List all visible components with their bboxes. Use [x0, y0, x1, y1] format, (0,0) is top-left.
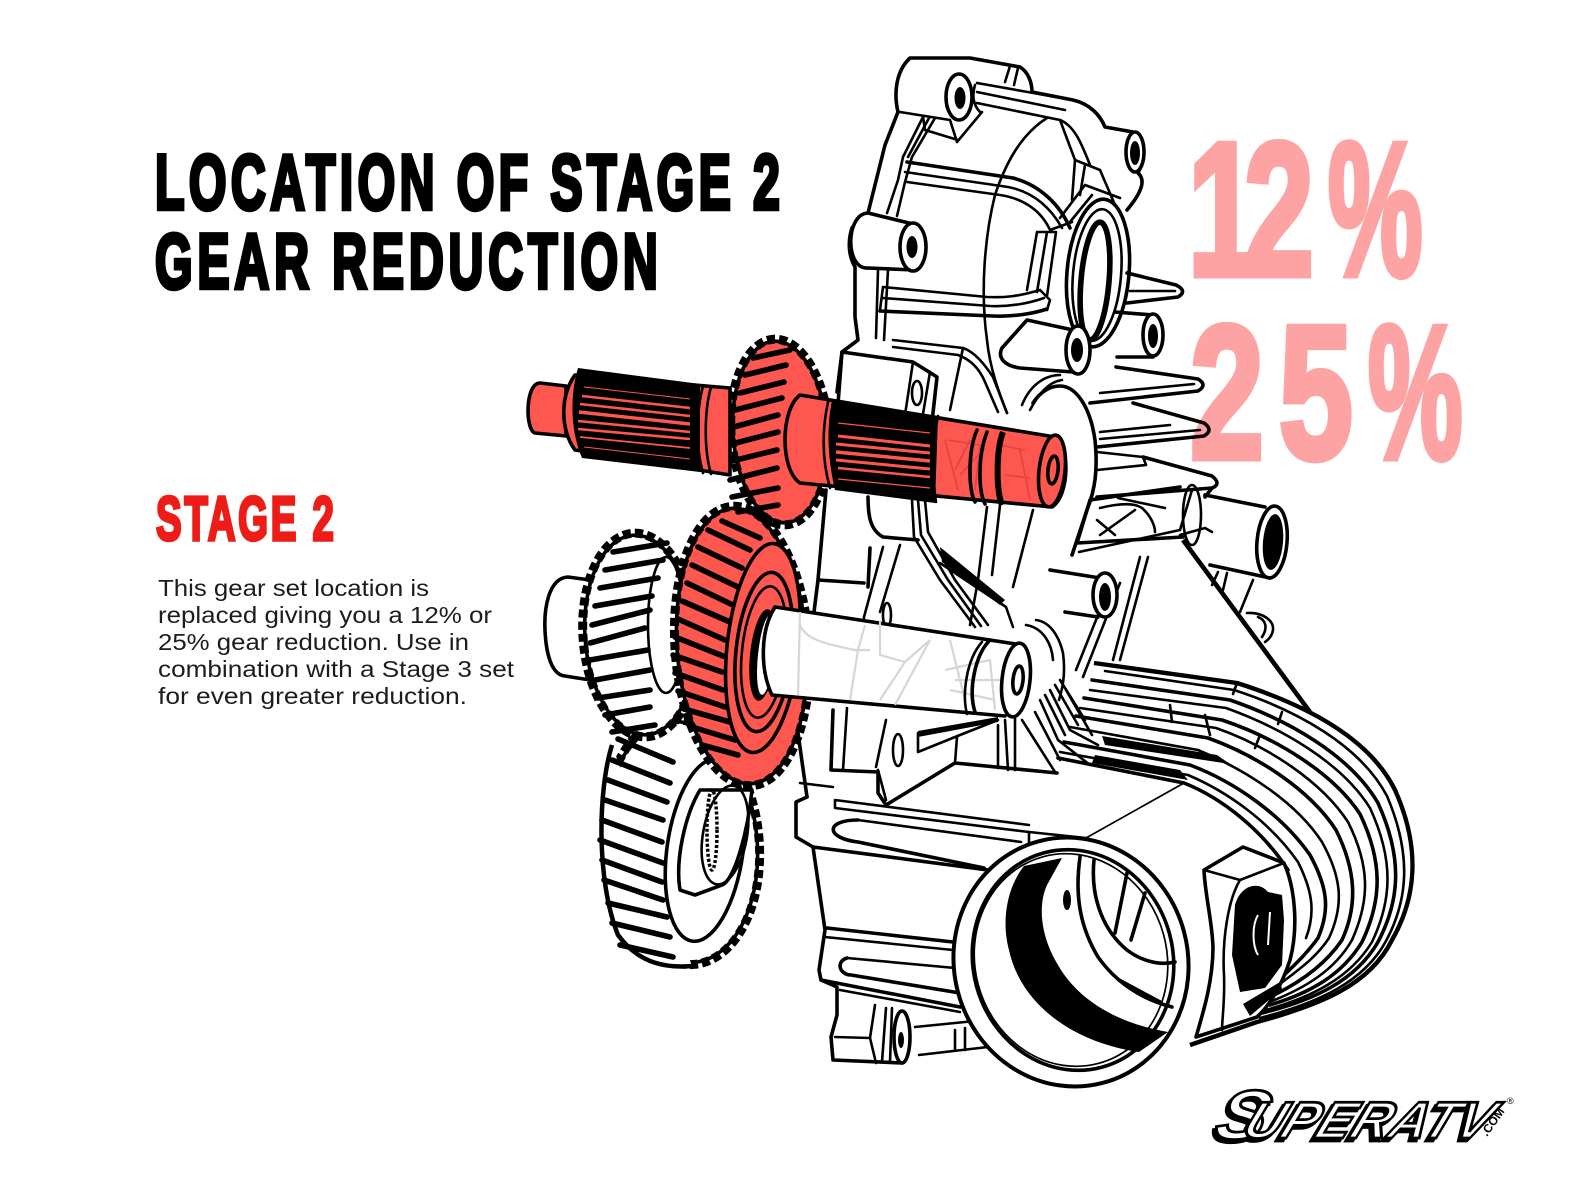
- upper lug bolt hole: [946, 74, 972, 120]
- helical teeth: [590, 543, 667, 732]
- cooling fins: [1090, 273, 1217, 497]
- gear inner ring: [655, 754, 755, 946]
- value: 12%: [1188, 103, 1423, 316]
- shaft collars: [970, 430, 987, 504]
- description text: [158, 575, 515, 709]
- mounting block: [836, 352, 937, 440]
- white lower shaft: [761, 607, 1034, 718]
- value: 12%: 1: [1188, 104, 1258, 316]
- spline section: [828, 400, 938, 503]
- value: 25%: 5: [1279, 287, 1353, 499]
- value: 12%: %: [1328, 103, 1423, 316]
- shaft end cap: [965, 640, 1034, 718]
- red stage 2 gear, lower: [665, 502, 819, 790]
- heading: LOCATION OF STAGE 2: [155, 138, 780, 226]
- left boss: [851, 213, 926, 271]
- transmission housing line drawing: [796, 58, 1412, 1113]
- heading: [155, 138, 780, 305]
- right boss outlet: [1205, 495, 1290, 579]
- helical teeth: [600, 739, 673, 957]
- logo suffix: [1478, 1096, 1514, 1139]
- top right boss: [1126, 132, 1144, 172]
- SuperATV logo: S: [1208, 1076, 1280, 1155]
- ghost lines through red shaft: [945, 440, 1030, 500]
- upper gear teeth: [728, 350, 790, 512]
- red gear teeth: [673, 521, 760, 755]
- logo suffix: .COM: [1478, 1105, 1507, 1139]
- stub shaft: [545, 577, 590, 680]
- description text: This gear set location is: [158, 575, 429, 601]
- percentage values: [1188, 103, 1463, 499]
- red shaft crossing the housing: [785, 395, 1069, 508]
- description text: for even greater reduction.: [158, 683, 467, 709]
- ribbed bell housing: [1058, 663, 1412, 1045]
- SuperATV logo: UPERATV: [1235, 1092, 1508, 1150]
- lower boss: [1001, 320, 1090, 374]
- lower white gear: [593, 712, 771, 972]
- interior black crescent: [1006, 858, 1168, 1052]
- description text: combination with a Stage 3 set: [158, 656, 515, 682]
- logo suffix: ®: [1507, 1096, 1514, 1106]
- white gear with stub shaft: [545, 529, 704, 741]
- ghost housing lines: [798, 612, 1000, 710]
- right boss mid: [1115, 312, 1163, 357]
- spline highlights: [578, 387, 690, 459]
- red stage 2 gear, upper: [725, 336, 835, 528]
- red gear hub rings: [716, 540, 810, 756]
- sealed cap with logo: [1196, 847, 1295, 1037]
- bearing ring: [1061, 197, 1135, 349]
- description text: 25% gear reduction. Use in: [158, 629, 469, 655]
- SuperATV logo: [1208, 1076, 1508, 1155]
- bracket below fins: [1076, 485, 1212, 677]
- small boss right of shaft: [1050, 570, 1117, 617]
- central housing ribs: [798, 485, 1310, 805]
- description text: replaced giving you a 12% or: [158, 602, 492, 628]
- value: 25%: [1190, 286, 1463, 499]
- housing opening ring: [926, 811, 1216, 1113]
- heading: GEAR REDUCTION: [155, 217, 658, 305]
- shaft end: [1035, 434, 1069, 508]
- sub-heading: stage 2: STAGE 2: [156, 484, 334, 553]
- upper housing casting: [836, 58, 1217, 555]
- red input shaft, left section: [528, 368, 730, 475]
- lower housing body: [796, 783, 1184, 1063]
- value: 25%: 2: [1190, 287, 1264, 499]
- value: 25%: %: [1368, 286, 1463, 499]
- value: 12%: 2: [1244, 104, 1314, 316]
